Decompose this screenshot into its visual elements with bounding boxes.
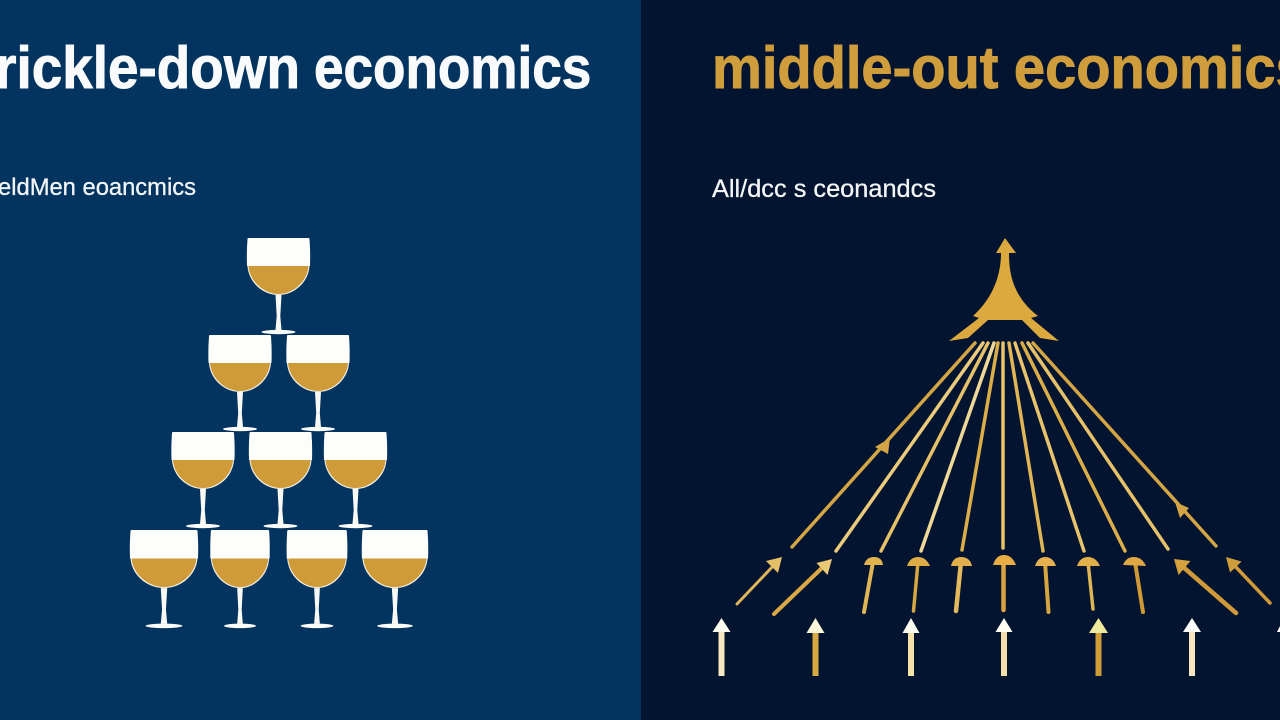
icon: apex arrow <box>949 238 1059 341</box>
arrow 7 <box>1035 557 1056 612</box>
bottom row of arrows <box>712 618 1280 676</box>
panel: trickle-down economics <box>0 0 641 720</box>
subheading: right: All/dcc s ceonandcs <box>712 175 936 203</box>
arrow: cream 4 <box>996 618 1012 676</box>
arrow 4 <box>907 557 930 611</box>
arrow 2 <box>774 559 832 614</box>
arrow 11 <box>1226 557 1270 603</box>
arrow 9 <box>1123 557 1146 612</box>
arrow: cream 1 <box>712 618 730 676</box>
arrow: cream 3 <box>902 618 920 676</box>
heading: trickle-down economics: economics <box>314 34 591 101</box>
arrow 1 <box>737 557 782 604</box>
arrow: cream 6 <box>1183 618 1201 676</box>
arrow 6 <box>993 555 1016 610</box>
arrow 5 <box>951 557 972 611</box>
subheading: left: eldMen eoancmics <box>0 174 196 201</box>
arrow 10 <box>1174 559 1236 613</box>
glass row 2 <box>208 335 350 431</box>
arrow: gold 5 <box>1089 618 1108 676</box>
middle row of arrows <box>737 555 1270 614</box>
champagne glass tower <box>130 238 428 628</box>
heading: trickle-down economics <box>0 34 591 101</box>
glass row 3 <box>171 432 387 528</box>
arrow 8 <box>1077 557 1100 609</box>
glass row 1 <box>247 238 310 334</box>
arrow 3 <box>864 557 883 612</box>
arrow: gold 2 <box>806 618 824 676</box>
arrow: clipped at edge <box>1277 618 1280 632</box>
panel: middle-out economics <box>641 0 1280 720</box>
radiating rays <box>792 343 1216 551</box>
glass row 4 <box>130 530 428 628</box>
